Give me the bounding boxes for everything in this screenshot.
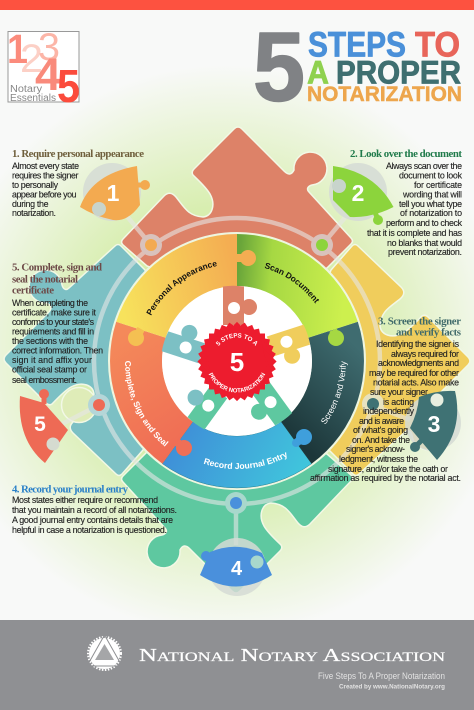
body: When completing the — [12, 298, 88, 308]
segment: personal appearance — [116, 234, 237, 338]
badge 4: 4 — [231, 558, 243, 580]
body: appear before you — [12, 190, 77, 200]
badge 1: 1 — [107, 180, 120, 206]
heading: 2. Look over the document — [350, 148, 462, 160]
title: TO — [415, 26, 460, 64]
body: A good journal entry contains details that are — [12, 515, 173, 525]
body: correct information. Then — [12, 346, 103, 356]
piece: left teal — [4, 244, 177, 476]
logo: Notary Essentials: Notary — [10, 84, 42, 95]
hub piece green left — [177, 378, 227, 430]
body: official seal stamp or — [12, 364, 87, 374]
heading: 5. Complete, sign and — [12, 262, 102, 274]
segment: complete, sign and seal — [110, 322, 193, 464]
body — [310, 339, 461, 483]
footer band — [0, 620, 474, 710]
body: and is aware — [359, 416, 404, 426]
step 1 text — [12, 148, 144, 218]
title — [253, 12, 462, 122]
heading — [378, 316, 461, 338]
body: seal embossment. — [12, 375, 77, 385]
body — [12, 495, 177, 535]
logo: Notary Essentials: 4 — [35, 49, 61, 100]
body — [367, 161, 463, 257]
body: wording that will — [402, 190, 462, 200]
association name: National Notary Association — [139, 645, 446, 665]
white hub — [162, 286, 312, 436]
badge 2 — [332, 166, 394, 225]
badge 4 — [200, 547, 272, 586]
body — [12, 161, 79, 218]
hub piece green right — [242, 382, 293, 434]
node 2 — [311, 234, 333, 256]
body: of notarization to — [400, 208, 462, 218]
body: of what's going — [353, 425, 408, 435]
body: that it is complete and has — [367, 228, 463, 238]
segment: record journal entry — [162, 422, 312, 488]
body: is acting — [383, 397, 414, 407]
badge 3 — [410, 391, 457, 460]
body: that you maintain a record of all notarizations. — [12, 505, 177, 515]
body: prevent notarization. — [388, 247, 462, 257]
heading: seal the notarial — [12, 274, 78, 286]
knob: record journal entry — [296, 437, 304, 443]
node 5 — [88, 394, 110, 416]
body: the sections with the — [12, 336, 88, 346]
body: sign it and affix your — [12, 355, 92, 365]
heading: and verify facts — [396, 326, 461, 338]
red seal: 5 — [230, 347, 244, 377]
step 2 text — [350, 148, 463, 257]
logo: Notary Essentials: 1 — [7, 26, 28, 72]
knob: scan document — [333, 330, 336, 337]
body: signature, and/or take the oath or — [328, 464, 448, 474]
body: certificate, make sure it — [12, 308, 97, 318]
body: for certificate — [414, 180, 462, 190]
icon: association seal — [87, 635, 122, 670]
body: tell you what type — [399, 199, 462, 209]
body: always required for — [391, 349, 459, 359]
knob: personal appearance lower — [136, 329, 141, 338]
body: signer's acknow- — [346, 444, 405, 454]
label: Record Journal Entry: Record Journal Entry — [204, 452, 287, 470]
body: requirements and fill in — [12, 326, 94, 336]
badge 3: 3 — [428, 411, 440, 437]
heading — [12, 262, 102, 296]
title: STEPS — [308, 26, 406, 64]
logo: Notary Essentials: 3 — [38, 26, 60, 69]
footer credit: Created by www.NationalNotary.org — [339, 684, 445, 690]
heading: 1. Require personal appearance — [12, 148, 144, 160]
label: Screen and Verify: Screen and Verify — [321, 361, 348, 424]
body: perform and to check — [386, 218, 463, 228]
red seal: 5 STEPS TO A — [216, 333, 258, 346]
badge 5: 5 — [34, 413, 46, 436]
body: notarial acts. Also make — [373, 378, 459, 388]
body: during the — [12, 199, 49, 209]
body — [12, 298, 103, 385]
heading: 4. Record your journal entry — [12, 484, 129, 496]
body: helpful in case a notarization is questioned. — [12, 525, 167, 535]
body: Most states either require or recommend — [12, 495, 158, 505]
body: document to look — [399, 170, 463, 180]
body: Identifying the signer is — [376, 339, 460, 349]
body: on. And take the — [352, 435, 410, 445]
heading: certificate — [12, 284, 54, 296]
badge 5 — [20, 389, 68, 463]
body: conforms to your state's — [12, 317, 95, 327]
body: Always scan over the — [386, 161, 462, 171]
title: NOTARIZATION — [307, 83, 462, 106]
knob: complete, sign and seal — [177, 442, 184, 448]
body: no blanks that would — [387, 238, 462, 248]
body: to personally — [12, 180, 59, 190]
logo: Notary Essentials: Essentials — [10, 93, 56, 104]
hub piece yellow — [267, 324, 315, 369]
logo: Notary Essentials — [7, 26, 80, 112]
segment: screen and verify — [281, 322, 364, 464]
body: independently — [363, 406, 415, 416]
node 3 — [362, 393, 384, 415]
node 1 — [140, 234, 162, 256]
node 4 — [225, 492, 247, 514]
step 3 text — [310, 316, 461, 483]
body: Almost every state — [12, 161, 79, 171]
outer puzzle pieces — [4, 127, 470, 593]
badge 2: 2 — [352, 180, 364, 206]
number badge backgrounds — [83, 163, 461, 596]
body: may be required for other — [369, 368, 459, 378]
step 5 text — [12, 262, 103, 385]
segment: scan document — [237, 234, 358, 338]
body: acknowledgments and — [378, 358, 459, 368]
red seal: PROPER NOTARIZATION — [208, 372, 266, 392]
central wheel — [108, 232, 366, 490]
step 4 text — [12, 484, 177, 535]
footer subtitle: Five Steps To A Proper Notarization — [318, 671, 445, 682]
label: Personal Appearance: Personal Appearance — [146, 262, 217, 316]
body: affirmation as required by the notarial act. — [310, 473, 461, 483]
hub piece salmon — [223, 286, 257, 325]
body: ledgment, witness the — [339, 454, 418, 464]
connector ring and spokes — [62, 214, 410, 545]
label: Complete, Sign and Seal: Complete, Sign and Seal — [124, 361, 169, 446]
logo: Notary Essentials: 2 — [20, 37, 43, 81]
red seal — [198, 322, 276, 401]
body: sure your signer — [370, 387, 428, 397]
piece: bottom green — [122, 420, 352, 593]
title: 5 — [253, 12, 305, 122]
body: requires the signer — [12, 170, 79, 180]
hub puzzle pieces — [161, 286, 315, 434]
label: Scan Document: Scan Document — [264, 263, 319, 304]
notch behind badge 5 — [62, 388, 96, 422]
heading: 3. Screen the signer — [378, 316, 461, 328]
title: A — [307, 54, 329, 90]
knob: personal appearance right — [236, 254, 248, 262]
logo: Notary Essentials: 5 — [57, 60, 80, 112]
piece: right yellow — [297, 244, 470, 476]
badge 1 — [80, 166, 150, 220]
ring nodes — [88, 234, 384, 514]
top red bar — [0, 0, 474, 10]
body: notarization. — [12, 208, 56, 218]
hub piece teal — [161, 319, 209, 363]
title: PROPER — [336, 54, 461, 90]
piece: top salmon — [122, 127, 352, 300]
